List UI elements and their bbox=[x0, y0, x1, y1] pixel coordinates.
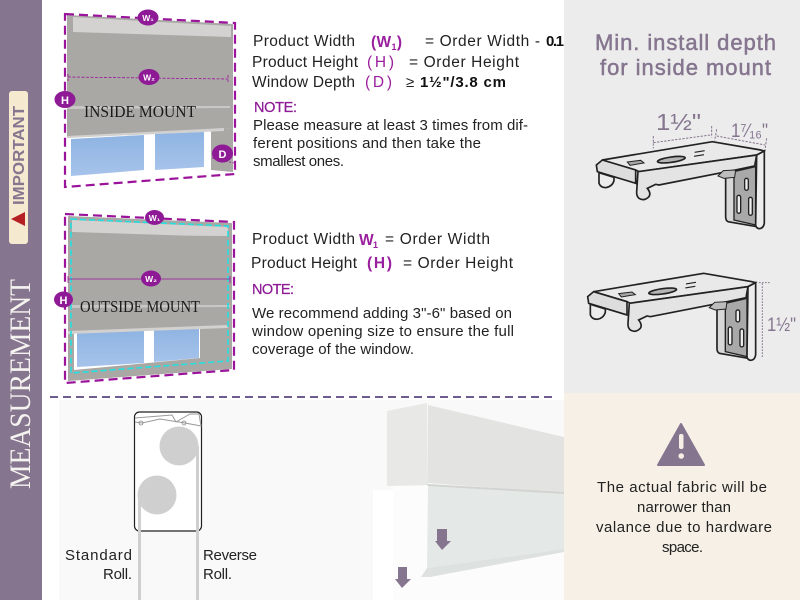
inside mount text block: 1 bbox=[391, 42, 396, 52]
icon: warning triangle bbox=[658, 424, 704, 465]
badge H: H bbox=[60, 295, 68, 307]
note text: space. bbox=[662, 539, 703, 556]
outside mount text block: 1 bbox=[373, 240, 378, 250]
panel: minimum install depth bbox=[564, 0, 800, 393]
label: reverse roll bbox=[203, 547, 257, 583]
inside mount text block: ≥ bbox=[406, 74, 414, 91]
dashed outline bbox=[65, 214, 234, 383]
outside mount text block: (H) bbox=[367, 255, 392, 272]
badge H bbox=[54, 91, 76, 108]
badge H: H bbox=[61, 95, 69, 107]
note text: valance due to hardware bbox=[596, 519, 772, 536]
heading: Min. install depth bbox=[595, 30, 776, 55]
inside mount text block: Product Width bbox=[253, 33, 355, 50]
panel: fabric note bbox=[564, 393, 800, 600]
badge D: D bbox=[219, 149, 227, 161]
width line w2 bbox=[68, 74, 228, 82]
roll cross-section bbox=[134, 412, 202, 600]
badge w2: W₂ bbox=[145, 274, 157, 284]
dashed divider bbox=[50, 396, 556, 398]
width line w2 bbox=[68, 276, 230, 283]
label: standard roll: Standard bbox=[65, 547, 132, 564]
panel: roll diagrams bbox=[59, 400, 564, 600]
bottom bracket label: 1½" bbox=[767, 315, 796, 336]
inside mount text block: (H) bbox=[367, 54, 394, 71]
inside mount text block: smallest ones. bbox=[253, 153, 344, 170]
inside mount text block: (D) bbox=[365, 74, 392, 91]
inside mount diagram bbox=[54, 10, 235, 187]
bottom bracket with dimension bbox=[588, 273, 770, 360]
label: outside mount: OUTSIDE MOUNT bbox=[80, 297, 201, 316]
outside mount text block: = Order Width bbox=[385, 231, 490, 248]
arrow: window edge bbox=[395, 567, 411, 588]
badge w1: W₁ bbox=[149, 213, 161, 223]
valance photo bbox=[373, 403, 564, 600]
outside mount diagram bbox=[54, 210, 234, 383]
top bracket labels bbox=[656, 109, 768, 142]
arrow: fabric bbox=[435, 529, 451, 550]
inside mount text block: = Order Height bbox=[409, 54, 520, 71]
badge w2 bbox=[138, 69, 160, 85]
outside mount text block: = Order Height bbox=[403, 255, 514, 272]
badge D bbox=[212, 144, 233, 162]
label: standard roll: Roll. bbox=[103, 566, 132, 583]
label: reverse roll: Reverse bbox=[203, 547, 257, 564]
inside mount text block: ferent positions and then take the bbox=[253, 135, 481, 152]
inside mount text block: Product Height bbox=[252, 54, 359, 71]
heading: for inside mount bbox=[600, 55, 771, 80]
sidebar bbox=[0, 0, 42, 600]
sidebar heading: measurement: MEASUREMENT bbox=[4, 279, 37, 489]
badge w1 bbox=[145, 210, 164, 225]
top bracket with dimensions bbox=[596, 126, 767, 229]
outside mount text block: Product Height bbox=[251, 255, 358, 272]
dashed outline bbox=[65, 14, 235, 187]
outside mount text block: NOTE: bbox=[252, 282, 294, 298]
label: standard roll bbox=[65, 547, 132, 583]
outside mount text block: W bbox=[359, 232, 374, 249]
important tag bbox=[9, 91, 28, 244]
inside mount text block: Window Depth bbox=[252, 74, 355, 91]
outside mount text block: window opening size to ensure the full bbox=[251, 323, 514, 340]
badge w2 bbox=[141, 270, 161, 286]
outside mount text block: Product Width bbox=[252, 231, 355, 248]
outside mount text block: We recommend adding 3"-6" based on bbox=[252, 305, 512, 322]
inside mount text block: 1½"/3.8 cm bbox=[420, 74, 506, 91]
note text: narrower than bbox=[637, 499, 731, 516]
label: reverse roll: Roll. bbox=[203, 566, 232, 583]
important tag: IMPORTANT bbox=[11, 106, 28, 205]
inside mount text block: = Order Width - bbox=[425, 33, 540, 50]
note text: The actual fabric will be bbox=[597, 479, 767, 496]
inside mount text block: 0.1 bbox=[546, 33, 564, 50]
inside mount text block: (W bbox=[371, 34, 391, 51]
inside mount text block bbox=[252, 33, 564, 170]
heading bbox=[595, 30, 776, 80]
inside mount text block: ) bbox=[397, 34, 402, 51]
outside mount text block bbox=[251, 231, 514, 358]
badge w1 bbox=[138, 10, 158, 26]
label: inside mount: INSIDE MOUNT bbox=[84, 102, 197, 121]
inside mount text block: NOTE: bbox=[254, 100, 297, 116]
cyan window outline bbox=[71, 219, 228, 373]
note text bbox=[596, 479, 772, 556]
top bracket labels: 1½" bbox=[656, 109, 701, 135]
badge w2: W₂ bbox=[143, 72, 155, 82]
badge w1: W₁ bbox=[142, 13, 154, 23]
badge H bbox=[54, 292, 73, 308]
inside mount text block: Please measure at least 3 times from dif- bbox=[253, 117, 528, 134]
top bracket labels: 1⁷⁄₁₆" bbox=[731, 121, 768, 142]
outside mount text block: coverage of the window. bbox=[252, 341, 414, 358]
